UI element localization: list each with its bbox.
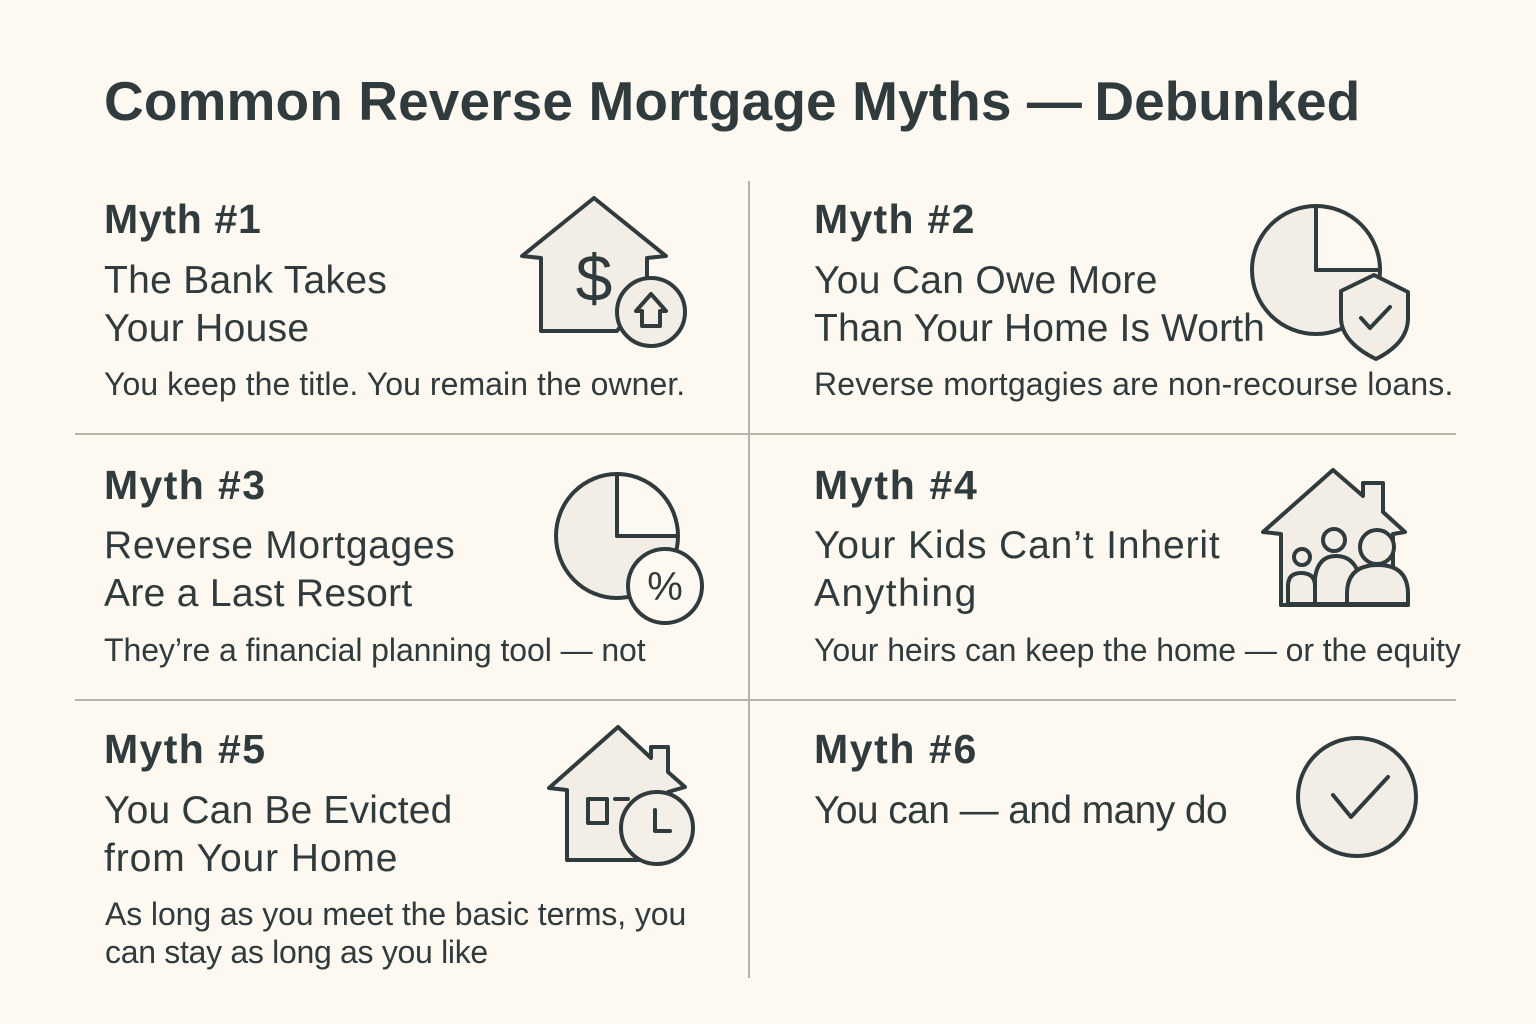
myth 3 statement xyxy=(104,524,455,615)
myth 3 statement: Are a Last Resort xyxy=(104,572,413,615)
myth 1 heading: Myth #1 xyxy=(104,196,262,242)
myth 1 statement xyxy=(104,259,387,350)
myth 2 explanation: Reverse mortgagies are non-recourse loans. xyxy=(814,366,1454,402)
myth 5 statement: from Your Home xyxy=(104,837,398,880)
myth 3 explanation: They’re a financial planning tool — not xyxy=(104,632,646,668)
panel: myth 1 xyxy=(104,196,685,402)
myth 2 heading: Myth #2 xyxy=(814,196,976,242)
panel: myth 4 xyxy=(814,462,1461,668)
panel: myth 3 xyxy=(104,462,646,668)
icon: pie chart with percent: % xyxy=(647,565,683,609)
myth 5 heading: Myth #5 xyxy=(104,726,266,772)
title: Common Reverse Mortgage Myths — Debunked xyxy=(104,70,1360,132)
myth 2 statement: Than Your Home Is Worth xyxy=(814,307,1265,350)
icon: check mark circle xyxy=(1298,738,1416,856)
icon: house with clock xyxy=(549,727,693,864)
myth 2 statement xyxy=(814,259,1265,350)
panel: myth 5 xyxy=(104,726,686,970)
myth 3 heading: Myth #3 xyxy=(104,462,266,508)
myth 5 statement: You Can Be Evicted xyxy=(104,789,453,832)
myth 4 heading: Myth #4 xyxy=(814,462,979,508)
myth 4 statement: Anything xyxy=(814,572,978,615)
myth 5 explanation: As long as you meet the basic terms, you xyxy=(105,896,686,932)
myth 5 statement xyxy=(104,789,453,880)
icon: pie chart with shield xyxy=(1252,206,1408,359)
myth 5 explanation xyxy=(105,896,686,970)
myth 6 statement: You can — and many do xyxy=(814,789,1227,832)
icon: house with dollar and home badge xyxy=(522,198,685,346)
panel: myth 2 xyxy=(814,196,1454,402)
myth 1 statement: Your House xyxy=(104,307,309,350)
panel: myth 6 xyxy=(814,726,1227,832)
myth 4 statement xyxy=(814,524,1221,615)
myth 4 statement: Your Kids Can’t Inherit xyxy=(814,524,1221,567)
myth 3 statement: Reverse Mortgages xyxy=(104,524,455,567)
icon: pie chart with percent xyxy=(556,474,702,623)
myth 1 explanation: You keep the title. You remain the owner. xyxy=(104,366,685,402)
icon: house with family xyxy=(1263,470,1408,605)
myth 6 heading: Myth #6 xyxy=(814,726,978,772)
icon: house with dollar and home badge: $ xyxy=(576,241,612,315)
myth 4 explanation: Your heirs can keep the home — or the equity xyxy=(814,632,1461,668)
myth 5 explanation: can stay as long as you like xyxy=(105,934,488,970)
myth 1 statement: The Bank Takes xyxy=(104,259,387,302)
myth 2 statement: You Can Owe More xyxy=(814,259,1158,302)
